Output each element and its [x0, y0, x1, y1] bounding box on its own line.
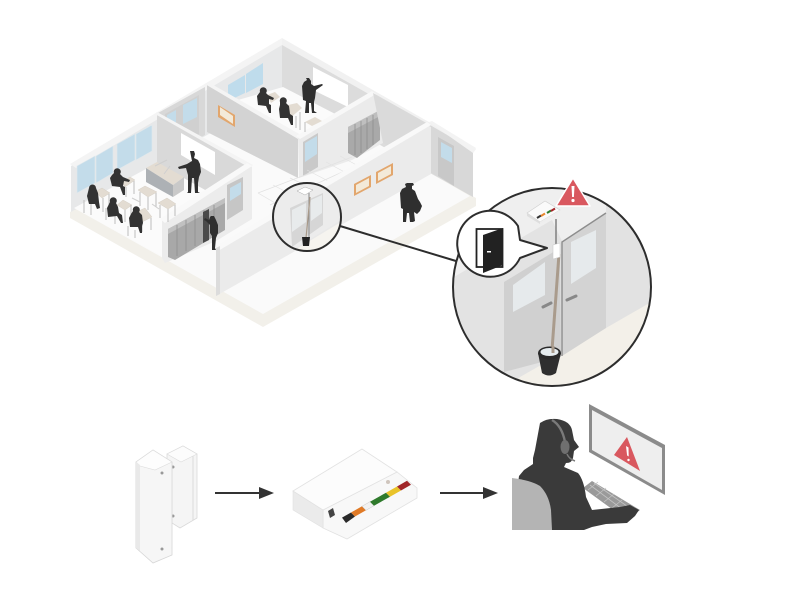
- icon: warning on screen: [614, 437, 640, 471]
- arrow: controller to operator: [440, 487, 498, 499]
- connector line from small circle to inset: [340, 226, 456, 261]
- student 2: [110, 168, 130, 195]
- upper classroom front wall with door: [296, 91, 383, 178]
- controller box product: [293, 449, 417, 539]
- door contact sensor product: [136, 446, 197, 563]
- person: teacher upper: [302, 78, 323, 113]
- sensor rear part: [167, 446, 197, 528]
- inset: magnified doors with sensor: [452, 180, 652, 387]
- body top: [293, 449, 397, 510]
- person: man with bag in corridor: [400, 183, 422, 222]
- bucket: [538, 346, 561, 376]
- sensor front part: [136, 450, 172, 563]
- hallway floor tiles: [258, 156, 362, 212]
- small callout circle on door: [272, 182, 342, 252]
- small back room with door: [158, 87, 205, 160]
- left classroom partition with whiteboard: [155, 112, 253, 192]
- operator silhouette with headset: [512, 419, 639, 530]
- left classroom furniture: [84, 160, 184, 238]
- student 3: [107, 197, 123, 223]
- ledge: [323, 472, 417, 539]
- headset: [552, 420, 575, 461]
- back walls: [70, 38, 476, 212]
- hallway wall with notice board: [205, 82, 301, 178]
- left door: [504, 248, 561, 372]
- isometric building floor plan: [70, 38, 476, 327]
- person: teacher left: [178, 151, 201, 193]
- icon: open door: [476, 228, 503, 273]
- icon: notice board: [218, 105, 235, 127]
- person: woman at lockers: [204, 216, 218, 250]
- door contact sensor: [553, 243, 560, 259]
- upper classroom furniture: [267, 92, 322, 132]
- body side: [293, 491, 323, 528]
- left classroom floor: [74, 163, 207, 256]
- door handles: [543, 296, 576, 307]
- monitor with alarm: [589, 404, 665, 495]
- notice boards on corridor wall: [354, 163, 393, 196]
- chair and desk legs: [84, 160, 175, 238]
- floor: [518, 304, 648, 385]
- pole: [552, 254, 559, 350]
- lockers left: [168, 198, 225, 260]
- teacher desk: [146, 162, 184, 197]
- main corridor wall: [214, 122, 431, 296]
- right wall and door room: [373, 93, 476, 197]
- chair back: [512, 478, 552, 530]
- student 4: [129, 206, 143, 233]
- door windows: [513, 262, 545, 312]
- keyboard: [583, 481, 640, 520]
- lockers upper: [348, 110, 380, 158]
- callout bubble: door open icon: [457, 211, 547, 277]
- arrow: sensor to controller: [215, 487, 274, 499]
- people: seated students upper: [257, 87, 293, 125]
- terminal blocks: [342, 481, 411, 523]
- icon: warning triangle: [556, 178, 590, 206]
- cable: [555, 219, 557, 244]
- upper classroom: [228, 63, 348, 137]
- student 1: [87, 184, 100, 209]
- right door: [562, 213, 606, 356]
- whiteboard upper: [313, 67, 348, 107]
- floor slab: [70, 88, 476, 327]
- network port: [328, 508, 335, 518]
- people: seated students left: [87, 168, 143, 233]
- wall above doors: [455, 189, 606, 276]
- controller box in inset: [527, 201, 560, 224]
- right wall: [606, 170, 660, 328]
- left classroom front wall with door: [160, 163, 252, 263]
- infographic canvas: [70, 38, 665, 564]
- left classroom windows: [77, 125, 152, 193]
- student desks: [95, 177, 176, 222]
